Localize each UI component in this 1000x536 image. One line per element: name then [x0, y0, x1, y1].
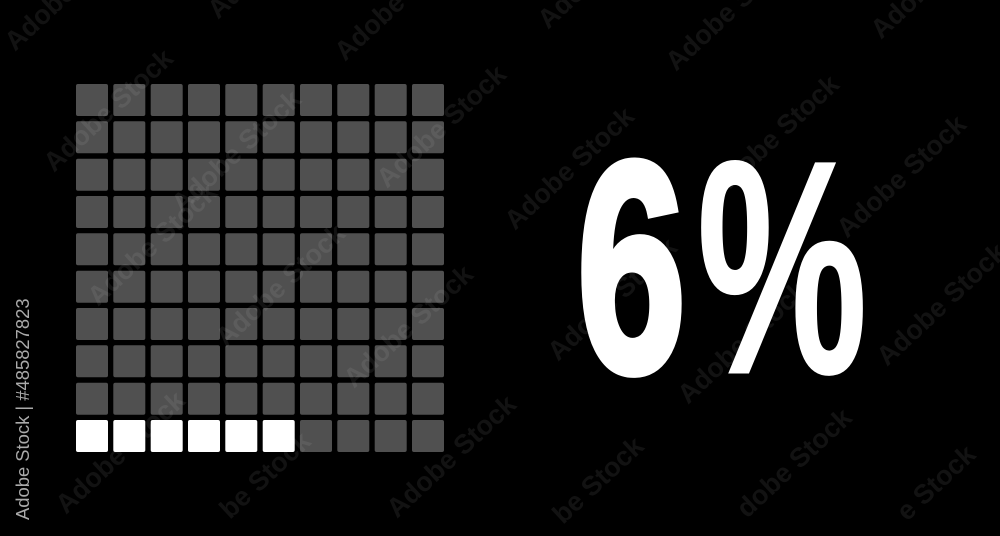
watermarks: Adobe Stock	[381, 388, 522, 523]
watermarks: Adobe Stock	[831, 108, 972, 243]
watermarks: Adobe Stock	[38, 42, 179, 177]
watermarks: dobe Stock	[731, 402, 858, 523]
waffle chart: 6 percent	[76, 84, 444, 452]
watermarks: be Stock	[547, 430, 650, 529]
watermarks: Adobe Stock	[210, 217, 351, 352]
watermarks: Adobe Stock	[542, 231, 683, 366]
watermarks: Adobe Stock	[704, 68, 845, 203]
watermarks: Adobe Stock	[166, 83, 307, 218]
watermarks: Adobe Stock	[82, 176, 223, 311]
watermarks: be Stock	[214, 425, 317, 524]
watermarks: Adobe Stock	[672, 274, 813, 409]
big number: 6: 6	[577, 99, 686, 435]
stock id caption: Adobe Stock | #485827823	[12, 298, 33, 520]
watermarks: Adobe Stock	[499, 100, 640, 235]
watermarks: Adobe Stock	[371, 58, 512, 193]
watermarks: Adobe Stock	[50, 384, 191, 519]
percent sign: %	[697, 97, 867, 437]
watermarks: Adobe Stock	[338, 258, 479, 393]
watermarks: e Stock	[891, 438, 982, 526]
